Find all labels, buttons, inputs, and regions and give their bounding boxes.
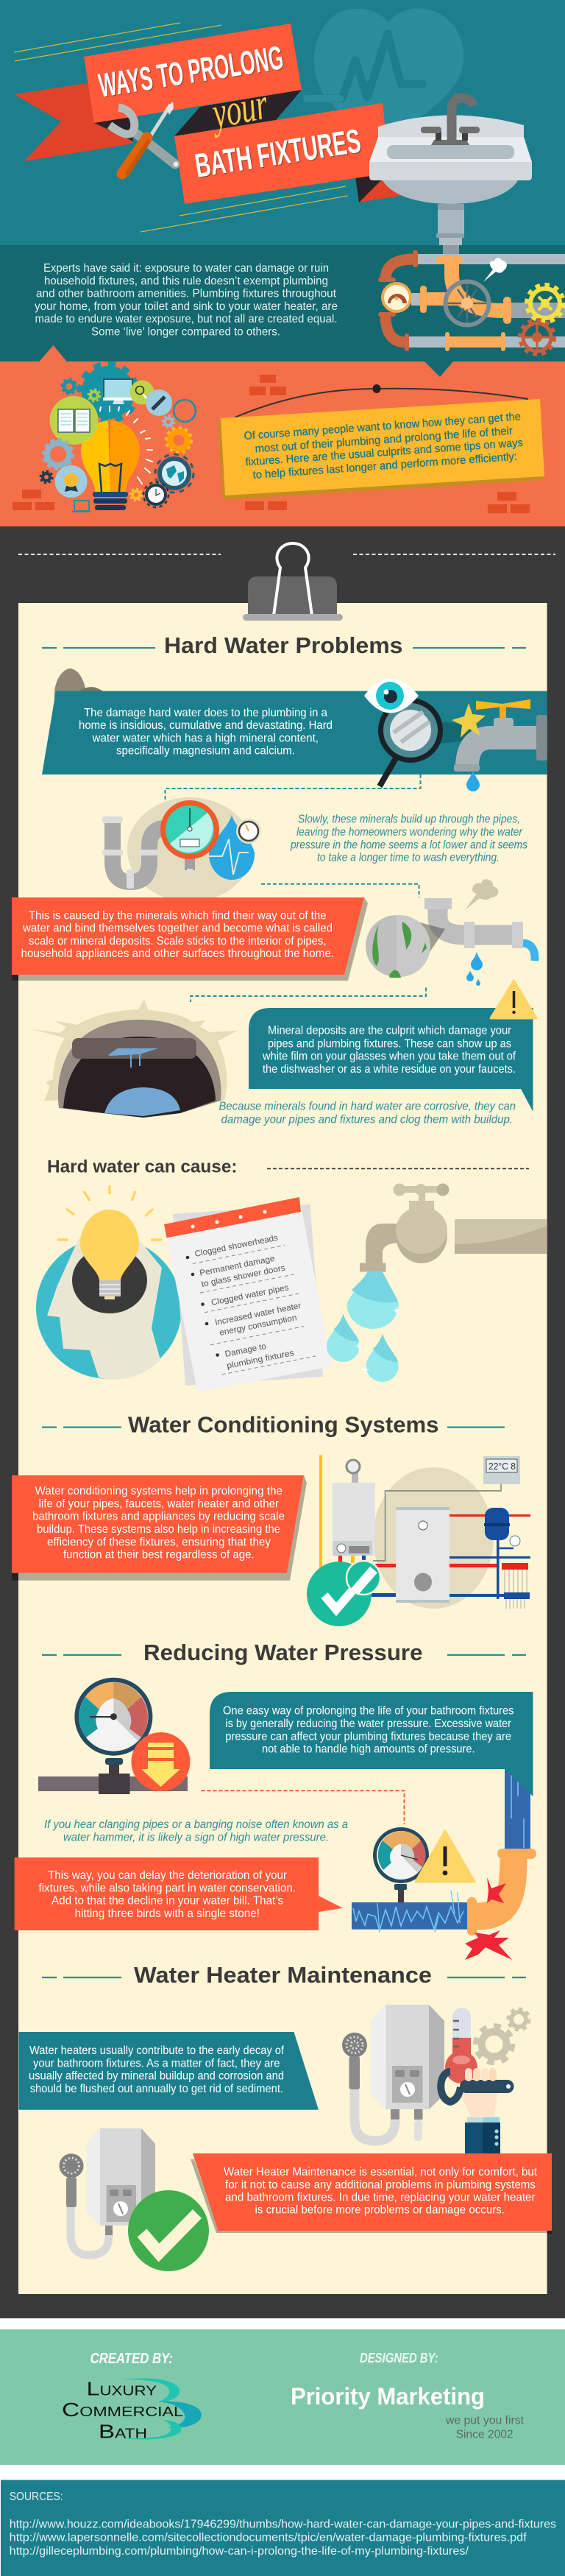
- callout: reducing pressure: not able to handle high amounts of pressure.: [262, 1743, 475, 1756]
- list: hard water effects: Damage to: [224, 1342, 267, 1359]
- callout: hanging sign: Of course many people want to know how they can get the: [244, 410, 521, 442]
- callout: water conditioning: function at their best regardless of age.: [63, 1549, 255, 1562]
- callout: maintenance: and bathroom fixtures. In due time, replacing your water heater: [225, 2192, 536, 2204]
- text: corrosive minerals: Because minerals found in hard water are corrosive, they can: [219, 1100, 516, 1113]
- icon: idea bulb with gears: [40, 364, 196, 512]
- text: designed by: DESIGNED BY:: [360, 2351, 438, 2365]
- icon: water system diagram: [307, 1455, 530, 1626]
- callout: water conditioning: bathroom fixtures and appliances by reducing scale: [32, 1511, 285, 1523]
- callout: reducing pressure: is by generally reducing the water pressure. Excessive water: [225, 1718, 512, 1730]
- icon: thermostat: [483, 1456, 520, 1484]
- list: hard water effects: Clogged showerheads: [194, 1234, 279, 1259]
- text: minerals build up: Slowly, these minerals build up through the pipes,: [298, 814, 520, 826]
- text: minerals build up: pressure in the home seems a lot lower and it seems: [290, 839, 527, 851]
- icon: hand holding wrench: [441, 2068, 514, 2153]
- callout: maintenance: for it not to cause any additional problems in plumbing systems: [225, 2178, 536, 2191]
- text: corrosive minerals: damage your pipes and fixtures and clog them with buildup.: [221, 1113, 513, 1126]
- text: Priority Marketing: [291, 2383, 525, 2441]
- icon: water heater with wrench hand: [342, 2005, 530, 2153]
- title ribbon: BATH FIXTURES: [193, 121, 363, 185]
- icon: monitor: [103, 378, 133, 404]
- intro text: [35, 262, 338, 339]
- logo: Luxury Commercial Bath: Commercial: [62, 2399, 183, 2421]
- intro text: Experts have said it: exposure to water can damage or ruin: [43, 262, 329, 275]
- title ribbon: your: [205, 80, 272, 138]
- callout: hard water intro: The damage hard water does to the plumbing in a: [84, 707, 327, 719]
- list: hard water effects: plumbing fixtures: [226, 1349, 295, 1371]
- heading: Water Conditioning Systems: Water Conditioning Systems: [128, 1412, 438, 1437]
- icon: magnifier: [129, 380, 154, 405]
- icon: globe gear: [155, 454, 193, 493]
- callout: water conditioning: [12, 1475, 307, 1581]
- heading: Water Heater Maintenance: Water Heater Maintenance: [134, 1962, 432, 1988]
- callout: hard water intro: specifically magnesium and calcium.: [116, 745, 295, 758]
- text: minerals build up: to take a longer time to wash everything.: [317, 852, 500, 864]
- panel: tips band: [0, 345, 565, 526]
- icon: brown gear: [520, 320, 554, 354]
- list: hard water effects: energy consumption: [218, 1313, 298, 1338]
- callout: reducing pressure: pressure can affect your plumbing fixtures because they are: [225, 1730, 511, 1743]
- callout: delay deterioration: [15, 1857, 343, 1930]
- callout: scale deposits: household appliances and other surfaces throughout the home.: [21, 948, 334, 960]
- icon: open book: [50, 396, 99, 445]
- logo: Luxury Commercial Bath: [62, 2377, 202, 2443]
- callout: mineral deposits: [249, 1008, 533, 1112]
- icon: medal: [55, 465, 88, 498]
- callout: water heaters: Water heaters usually contribute to the early decay of: [29, 2044, 285, 2057]
- panel: sources: http://gilleceplumbing.com/plumbing/how-can-i-prolong-the-life-of-my-plumbing-fixtures/: [10, 2545, 469, 2558]
- intro text: and other bathroom amenities. Plumbing fixtures throughout: [36, 288, 337, 300]
- text: water hammer: [44, 1818, 348, 1844]
- text: water hammer: If you hear clanging pipes or a banging noise often known as a: [44, 1818, 348, 1831]
- icon: background heart with pulse: [307, 8, 463, 144]
- icon: thermometer: [445, 2008, 477, 2083]
- list: hard water effects: Increased water heater: [214, 1302, 302, 1327]
- cream sheet: [18, 603, 547, 2294]
- callout: water heaters: should be flushed out annually to get rid of sediment.: [30, 2083, 283, 2095]
- heading: Reducing Water Pressure: Reducing Water Pressure: [143, 1640, 422, 1665]
- text: Priority Marketing: we put you first: [445, 2415, 525, 2427]
- icon: globe outline: [174, 400, 196, 422]
- callout: mineral deposits: pipes and plumbing fixtures. These can show up as: [268, 1037, 511, 1050]
- text: created by: CREATED BY:: [90, 2351, 173, 2367]
- callout: scale deposits: This is caused by the minerals which find their way out of the: [29, 910, 327, 922]
- panel: sources: http://www.houzz.com/ideabooks/17946299/thumbs/how-hard-water-can-damage-your-pipes-and-fixtures: [10, 2518, 556, 2530]
- intro text: Some ‘live’ longer compared to others.: [91, 325, 280, 339]
- icon: hole in wall with broken pipe: [32, 999, 238, 1118]
- icon: water heater with green check: [59, 2128, 209, 2271]
- callout: hard water intro: water water which has a high mineral content,: [92, 732, 319, 745]
- icon: thermostat: 22°C 8: [488, 1461, 516, 1472]
- panel: intro band: [0, 245, 565, 361]
- callout: hanging sign: to help fixtures last longer and perform more efficiently:: [252, 451, 517, 481]
- callout: delay deterioration: hitting three birds with a single stone!: [75, 1908, 260, 1920]
- icon: check badge: [307, 1561, 380, 1626]
- icon: binder clip: [243, 543, 343, 621]
- callout: water conditioning: buildup. These systems also help in increasing the: [37, 1523, 280, 1536]
- icon: faucet with magnifier and eye: [364, 679, 547, 791]
- callout: delay deterioration: Add to that the decline in your water bill. That’s: [51, 1895, 283, 1908]
- icon: clock: [143, 482, 168, 507]
- icon: rocks: [54, 668, 113, 703]
- panel: dark clipboard: [0, 526, 565, 2318]
- heading: Hard Water Problems: Hard Water Problems: [164, 632, 403, 658]
- icon: eye: [364, 679, 419, 713]
- intro text: made to endure water exposure, but not all are created equal.: [35, 313, 337, 325]
- callout: hard water intro: [42, 691, 547, 774]
- callout: hanging sign: [218, 384, 544, 500]
- text: Priority Marketing: Priority Marketing: [291, 2383, 485, 2410]
- callout: hanging sign: most out of their plumbing and prolong the life of their: [255, 425, 513, 455]
- callout: scale deposits: scale or mineral deposits. Scale sticks to the interior of pipes,: [29, 935, 327, 948]
- icon: head with lightbulb: [36, 1185, 182, 1380]
- bricks: [13, 375, 530, 513]
- callout: maintenance: Water Heater Maintenance is essential, not only for comfort, but: [224, 2166, 538, 2178]
- list: hard water effects: [164, 1197, 332, 1392]
- icon: warning sign: [491, 981, 536, 1018]
- panel: sources: SOURCES:: [10, 2491, 63, 2503]
- panel: sources: http://www.lapersonnelle.com/sitecollectiondocuments/tpic/en/water-damage-plumbing-fixtures.pdf: [10, 2532, 527, 2544]
- icon: beige gears: [476, 2008, 530, 2063]
- title ribbon: [14, 24, 406, 204]
- title ribbon: WAYS TO PROLONG: [96, 38, 286, 105]
- panel: credits: [0, 2329, 565, 2465]
- callout: hard water intro: home is insidious, cumulative and devastating. Hard: [79, 719, 333, 732]
- callout: maintenance: [191, 2153, 552, 2234]
- icon: sink: [369, 98, 532, 246]
- icon: leaking pipe with mineral buildup: [366, 879, 535, 986]
- list: hard water effects: to glass shower doors: [201, 1263, 286, 1289]
- icon: pressure gauge: [381, 282, 412, 313]
- icon: yellow gear: [527, 285, 564, 322]
- icon: valve wheel: [445, 281, 489, 325]
- text: minerals build up: [290, 814, 527, 864]
- callout: water heaters: usually affected by mineral buildup and corrosion and: [29, 2070, 284, 2083]
- callout: scale deposits: [12, 897, 368, 981]
- callout: mineral deposits: white film on your glasses when you take them out of: [262, 1051, 516, 1063]
- text: minerals build up: leaving the homeowners wondering why the water: [296, 826, 523, 839]
- callout: delay deterioration: This way, you can delay the deterioration of your: [48, 1869, 288, 1882]
- logo: Luxury Commercial Bath: Bath: [99, 2421, 147, 2443]
- panel: sources: [1, 2480, 565, 2576]
- small gears: [40, 379, 191, 501]
- icon: faucet: [421, 98, 480, 145]
- icon: water drops: [327, 1271, 401, 1382]
- callout: mineral deposits: Mineral deposits are the culprit which damage your: [268, 1025, 512, 1037]
- callout: reducing pressure: One easy way of prolonging the life of your bathroom fixtures: [223, 1705, 514, 1718]
- panel: header: [0, 0, 565, 246]
- callout: mineral deposits: the dishwasher or as a white residue on your faucets.: [263, 1063, 516, 1076]
- callout: hanging sign: fixtures. Here are the usual culprits and some tips on ways: [245, 437, 523, 468]
- callout: water conditioning: Water conditioning systems help in prolonging the: [35, 1485, 282, 1497]
- icon: steam: [483, 258, 507, 282]
- callout: reducing pressure: [210, 1692, 533, 1849]
- intro text: household fixtures, and this rule doesn’t exempt plumbing: [44, 275, 328, 287]
- callout: water heaters: [19, 2032, 319, 2110]
- icon: pressure gauge with down arrow: [38, 1678, 190, 1794]
- callout: delay deterioration: fixtures, while also taking part in water conservation.: [38, 1882, 296, 1894]
- text: Priority Marketing: Since 2002: [456, 2429, 514, 2441]
- icon: pressure gauge on pipe: [102, 797, 261, 902]
- icon: crossed wrench and screwdriver: [110, 102, 178, 175]
- intro text: your home, from your toilet and sink to your water heater, are: [35, 300, 338, 313]
- icon: pipes and valve: [378, 250, 565, 354]
- icon: laptop: [72, 501, 90, 512]
- text: corrosive minerals: [219, 1100, 516, 1126]
- callout: water heaters: your bathroom fixtures. As a matter of fact, they are: [33, 2057, 280, 2069]
- callout: scale deposits: water and bind themselves together and become what is called: [22, 922, 333, 935]
- callout: maintenance: is crucial before more problems or damage occurs.: [255, 2204, 505, 2217]
- logo: Luxury Commercial Bath: Luxury: [87, 2377, 157, 2399]
- text: water hammer: water hammer, it is likely a sign of high water pressure.: [63, 1832, 329, 1844]
- list: hard water effects: Clogged water pipes: [210, 1283, 290, 1308]
- icon: faucet with drops: [327, 1184, 547, 1382]
- callout: water conditioning: efficiency of these fixtures, ensuring that they: [47, 1536, 271, 1548]
- icon: pencil: [146, 389, 172, 416]
- heading: Hard water can cause: Hard water can cause:: [47, 1157, 237, 1177]
- icon: damaged pipe with gauge and warning: [352, 1827, 536, 1960]
- list: hard water effects: Permanent damage: [199, 1255, 276, 1278]
- callout: water conditioning: life of your pipes, faucets, water heater and other: [38, 1497, 280, 1510]
